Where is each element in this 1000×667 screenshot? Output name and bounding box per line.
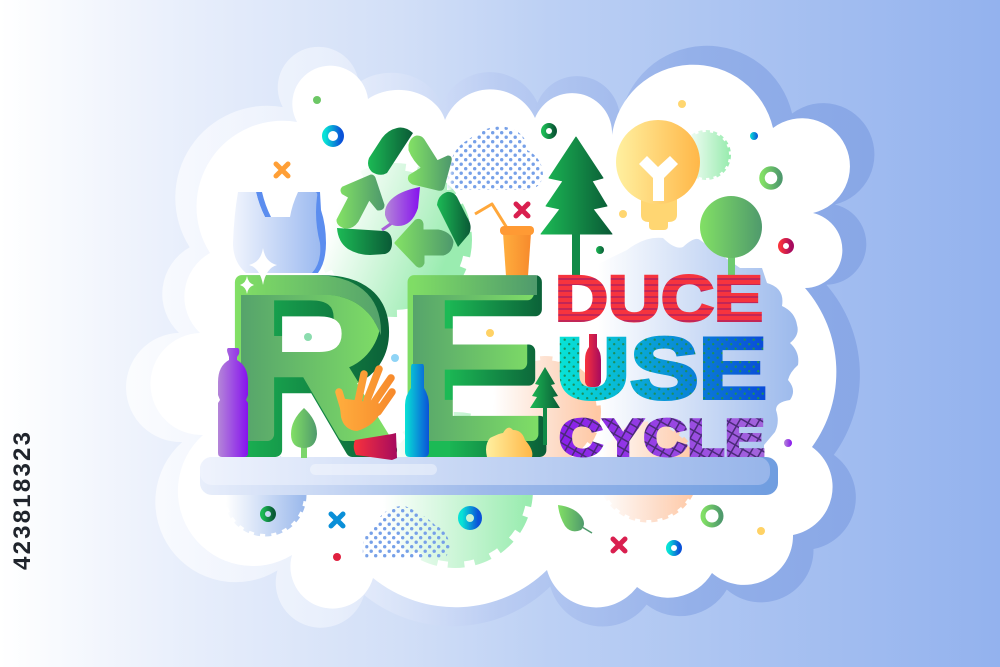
ring: green under shelf [262, 508, 274, 520]
gear: mint behind recycle symbol [325, 170, 465, 310]
recycle band: right [437, 192, 471, 247]
big letter E [408, 275, 546, 457]
dot: green top [313, 96, 321, 104]
word: DUCE: DUCE [555, 262, 763, 334]
gear: peach under shelf [600, 424, 696, 520]
ring: green bottom [703, 507, 721, 525]
icon: orange hand [339, 369, 392, 431]
word: USE: USE [556, 321, 767, 417]
cross: orange [276, 164, 288, 176]
cross: blue [331, 514, 343, 526]
white cloud [151, 65, 850, 609]
icon: tall pine tree [541, 137, 612, 276]
halftone cloud: bottom [362, 506, 450, 558]
icon: sparkle small [240, 276, 254, 294]
halftone cloud: top [447, 126, 543, 190]
recycle band: top [368, 128, 413, 175]
icon: sparkle large [249, 248, 277, 285]
icon: red bottle in U [585, 334, 601, 387]
icon: light bulb [616, 120, 700, 230]
icon: small pine tree [530, 367, 560, 445]
recycle arrow: left [338, 176, 383, 227]
icon: purple plastic bottle [218, 348, 248, 457]
icon: yellow blob [486, 428, 532, 457]
recycle arrow: bottom [396, 220, 452, 266]
dot: light blue [391, 354, 399, 362]
ring: green small [544, 126, 554, 136]
gear: large blue [598, 238, 798, 460]
gear: peach behind letters [493, 360, 597, 464]
icon: plastic bag [233, 192, 326, 273]
recycle band: bottom [337, 228, 392, 255]
ring: red [780, 240, 792, 252]
big letter E: E [391, 213, 541, 486]
dot: mint in R [304, 333, 312, 341]
icon: round tree [700, 196, 762, 276]
dot: blue [750, 132, 758, 140]
icon: green leaf [558, 505, 592, 533]
ring: blue bottom [668, 542, 680, 554]
icon: purple leaf [382, 187, 420, 230]
icon: small round tree [291, 408, 317, 458]
recycle arrow: top right [409, 137, 450, 189]
icon: cup with straw [475, 204, 534, 276]
big letter R: R [218, 213, 387, 486]
icon: blue glass bottle [405, 364, 429, 457]
dot: yellow bottom [757, 527, 765, 535]
decorative markers [262, 96, 792, 561]
shelf [200, 457, 778, 495]
stock id: 423818323 [9, 432, 36, 570]
ring: cyan top left [325, 128, 341, 144]
dot: red [333, 553, 341, 561]
word: CYCLE: CYCLE [559, 410, 765, 468]
gear: blue under shelf [226, 456, 304, 534]
ring: green right [762, 169, 780, 187]
recycling symbol [337, 128, 471, 266]
cross: red near cup [516, 204, 528, 216]
gear: small mint by bulb [683, 132, 729, 178]
dot: yellow upper [678, 100, 686, 108]
dot: yellow in E [486, 329, 494, 337]
gear: green under shelf [383, 418, 527, 562]
icon: fallen red cup [354, 433, 397, 460]
cloud halo and shadow [126, 46, 874, 628]
dot: yellow lower [619, 210, 627, 218]
big letter R [234, 275, 398, 457]
cross: red bottom [613, 539, 625, 551]
dot: green [596, 246, 604, 254]
ring: blue under shelf [462, 510, 478, 526]
dot: purple [784, 439, 792, 447]
